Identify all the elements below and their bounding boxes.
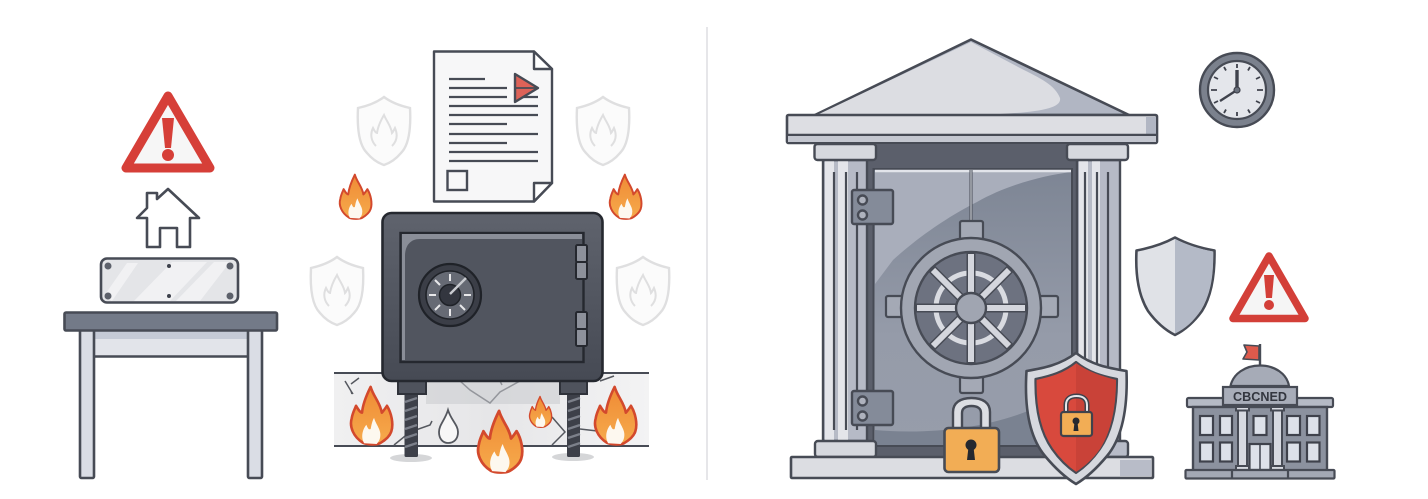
vault recess	[867, 143, 1077, 457]
icon: clock	[1200, 53, 1274, 127]
building name: CBCNED	[1233, 390, 1287, 404]
icon: warning triangle	[126, 96, 210, 168]
cracked wall	[334, 373, 649, 446]
building base	[1186, 470, 1334, 478]
icon: warning triangle small	[1233, 256, 1305, 318]
panel: right vault scene	[787, 40, 1334, 484]
safe	[382, 213, 602, 381]
thin metal plate	[101, 258, 238, 302]
icon: house	[137, 189, 199, 247]
vault door	[874, 169, 1072, 446]
building columns	[1236, 407, 1284, 470]
platform	[791, 457, 1153, 478]
divider	[706, 27, 708, 480]
icon: grey shield	[1136, 238, 1215, 335]
padlock	[944, 398, 999, 472]
red shield	[1026, 353, 1127, 484]
table	[64, 312, 277, 478]
panel: left weak protection scene	[64, 96, 277, 478]
entablature	[787, 115, 1157, 143]
bank temple	[787, 40, 1157, 484]
columns	[814, 144, 1128, 457]
safe hinges	[576, 245, 587, 346]
pediment roof	[815, 40, 1129, 115]
safe dial	[419, 264, 481, 326]
flames at wall	[351, 387, 636, 473]
flames beside document	[340, 175, 641, 219]
building dome	[1230, 366, 1289, 386]
building flag	[1243, 344, 1260, 366]
document	[434, 52, 552, 202]
vault wheel	[886, 221, 1058, 393]
panel: middle safe scene	[311, 52, 669, 473]
building windows	[1200, 416, 1320, 470]
anchor bolts	[390, 380, 594, 462]
door hinges	[852, 190, 893, 425]
faded fire shields	[311, 97, 669, 325]
icon: government building	[1186, 344, 1334, 478]
